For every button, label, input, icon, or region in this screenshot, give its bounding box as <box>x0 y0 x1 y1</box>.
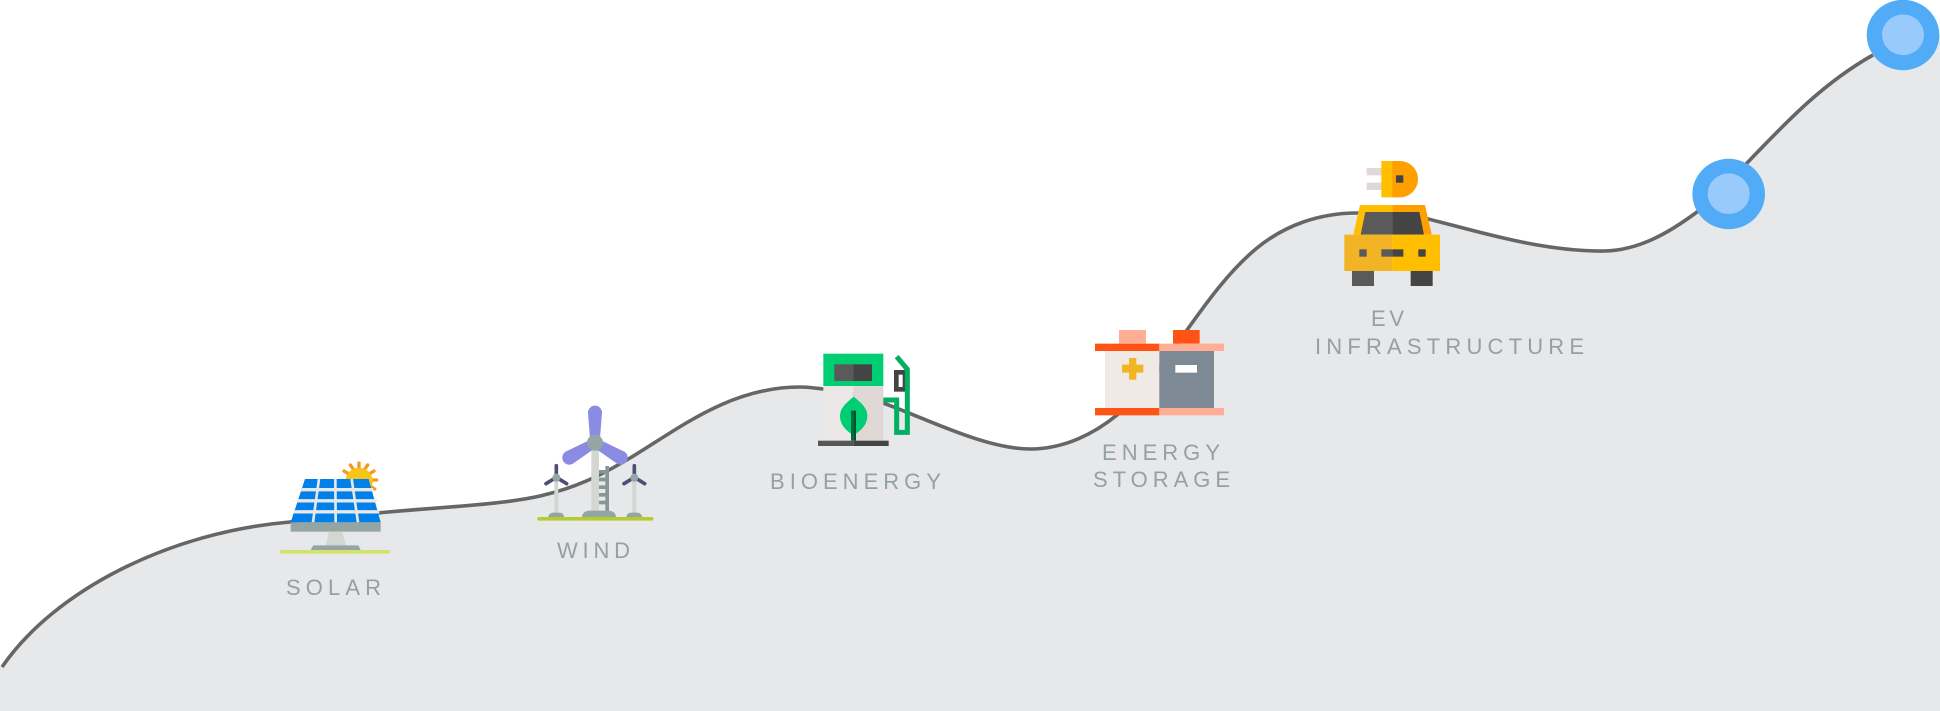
large turbine hub <box>587 435 603 451</box>
plug <box>1367 161 1418 197</box>
pump base <box>818 441 889 446</box>
label: EV infrastructure: EV <box>1371 306 1404 331</box>
milestone marker: top <box>1867 0 1939 70</box>
icon: bioenergy pump <box>818 354 907 446</box>
label: energy storage <box>1093 440 1230 492</box>
negative terminal <box>1173 330 1200 344</box>
windshield <box>1361 212 1424 235</box>
label: energy storage: STORAGE <box>1093 467 1230 492</box>
large turbine tower <box>591 448 599 512</box>
large turbine blades <box>562 406 628 465</box>
fuel hose <box>883 357 907 432</box>
icon: battery <box>1095 330 1224 415</box>
ladder <box>599 466 609 512</box>
pump top panel <box>823 354 883 386</box>
right small turbine <box>624 466 645 517</box>
icon: wind turbines <box>537 406 653 521</box>
label: bioenergy: BIOENERGY <box>770 469 941 494</box>
large turbine base <box>582 511 616 517</box>
car body <box>1344 235 1440 271</box>
sun <box>344 463 377 495</box>
milestone marker: middle <box>1692 159 1765 229</box>
pump body <box>823 386 883 441</box>
solar cells <box>291 479 381 522</box>
icon: solar panel <box>280 463 390 554</box>
icon: EV car and plug <box>1344 161 1440 286</box>
display <box>834 364 872 381</box>
wheels <box>1352 271 1433 286</box>
leaf <box>840 397 867 435</box>
nozzle handle <box>896 372 905 389</box>
label: EV infrastructure <box>1315 306 1584 359</box>
label: EV infrastructure: INFRASTRUCTURE <box>1315 334 1584 359</box>
leaf stem <box>851 411 856 441</box>
car roof <box>1353 205 1432 235</box>
positive terminal <box>1119 330 1146 344</box>
ground <box>280 550 390 554</box>
car lights <box>1359 249 1426 257</box>
plus sign <box>1122 358 1143 380</box>
label: energy storage: ENERGY <box>1102 440 1220 465</box>
stand <box>326 532 346 545</box>
battery left cell <box>1105 351 1159 408</box>
left small turbine <box>546 466 567 517</box>
minus sign <box>1175 365 1197 373</box>
stand base <box>311 545 361 550</box>
label: solar: SOLAR <box>286 575 381 600</box>
label: wind: WIND <box>557 538 630 563</box>
ground <box>537 517 653 521</box>
battery right cell <box>1159 351 1214 408</box>
battery bars <box>1095 344 1224 415</box>
panel frame <box>291 522 381 532</box>
